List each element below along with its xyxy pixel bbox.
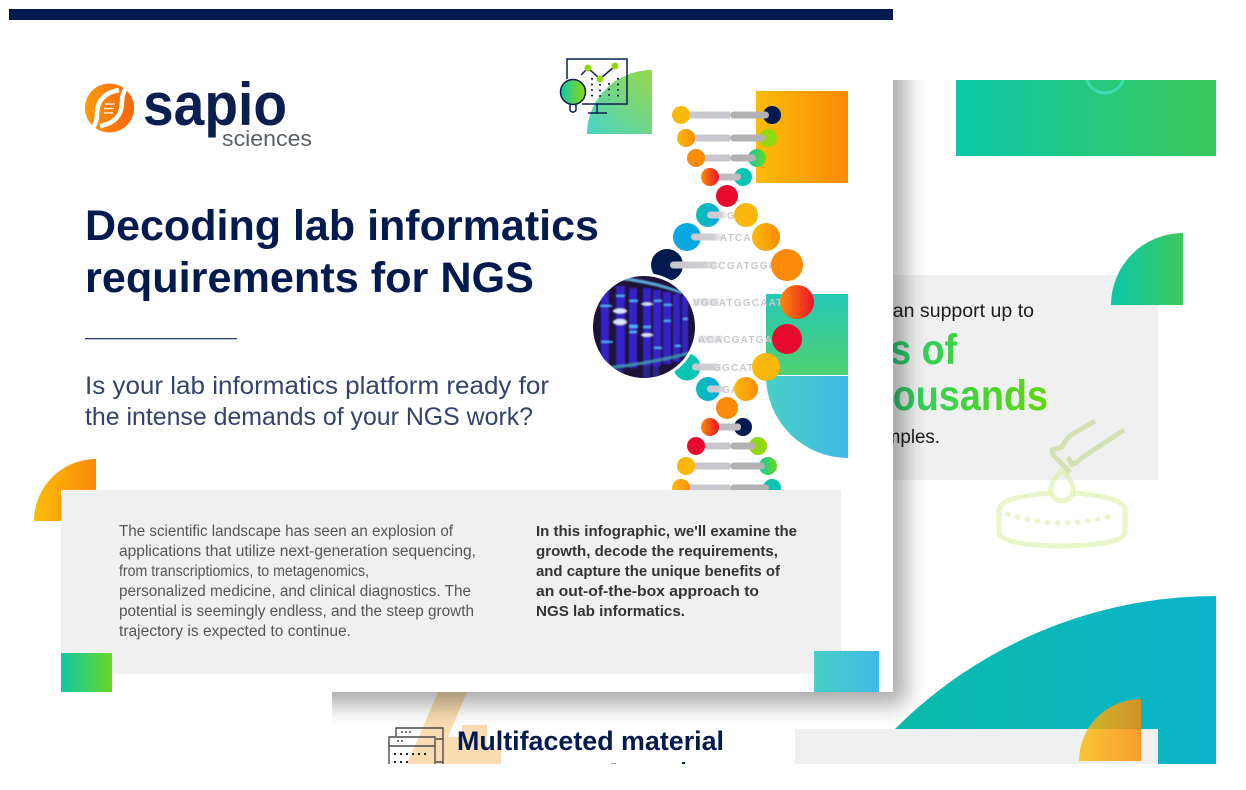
logo: Sapio Sciences [85,71,312,151]
intro text right: and capture the unique benefits of [536,563,781,580]
circular photo: sequencing gel [590,273,698,382]
front page sheet [9,20,893,692]
quarter circle decoration, orange [1079,699,1141,761]
top navy bar [9,9,893,20]
intro text right: In this infographic, we'll examine the [536,523,797,540]
DNA base letters: VGGATGGCAAT [693,298,784,309]
DNA base letters [693,211,786,396]
quarter circle decoration, orange [34,459,96,521]
icon: pipette over petri dish [999,421,1125,546]
callout text [893,304,1046,447]
DNA base letters: GGCAT [713,363,754,374]
sub wordmark: sciences [222,126,312,151]
wordmark: sapio [143,71,287,138]
subtitle [85,372,549,431]
helix rungs [670,112,769,492]
pale orange diagonal shape [407,692,501,764]
blue square decoration [814,651,879,692]
DNA base letters: ATCAC [720,233,760,244]
drop shadow of front page [332,80,920,718]
intro text right: growth, decode the requirements, [536,543,778,560]
clipped tops of next heading line [611,762,685,764]
intro text right [536,523,797,620]
intro text left: trajectory is expected to continue. [119,623,351,640]
heading: multifaceted material: Multifaceted material [457,726,724,756]
DNA base letters: G [727,211,736,222]
callout text: thousands [857,372,1048,420]
green square decoration [61,653,112,692]
panel: intro [61,490,841,674]
mid-section right bases over rungs [716,185,814,419]
callout text: tens of [834,326,958,374]
subtitle: the intense demands of your NGS work? [85,403,533,431]
icon: stacked windows [389,728,443,764]
intro text left: from transcriptiomics, to metagenomics, [119,563,369,580]
intro text left: personalized medicine, and clinical diagnostics. The [119,583,471,600]
title: Decoding lab informatics [85,202,599,250]
outer section left bases over rungs [672,106,719,497]
DNA base letters: GA [722,385,739,396]
intro text right: an out-of-the-box approach to [536,583,759,600]
callout text: can support up to [883,301,1034,322]
title: requirements for NGS [85,254,534,302]
title [85,202,599,302]
teal banner at top right [956,80,1216,156]
intro text left: applications that utilize next-generation sequencing, [119,543,476,560]
quarter circle decoration, green [1111,233,1183,305]
chart: DNA helix [651,106,814,497]
panel: lower grey block [795,729,1158,764]
callout text: samples. [865,427,940,448]
intro text left [119,523,476,640]
intro text left: potential is seemingly endless, and the steep growth [119,603,474,620]
outer section right bases under rungs [734,106,781,497]
mid-section left bases under rungs [651,203,720,401]
subtitle: Is your lab informatics platform ready for [85,372,549,400]
icon: chart presentation [560,59,652,134]
panel: sample support callout [893,275,1158,480]
DNA base letters: CCGATGGCA [710,261,786,272]
decorative squares behind DNA [756,91,848,458]
DNA base letters: ACACGATGA [698,335,773,346]
icon: logo mark [85,84,134,132]
intro text left: The scientific landscape has seen an explosion of [119,523,454,540]
intro text right: NGS lab informatics. [536,603,685,620]
big teal arc [895,596,1216,764]
